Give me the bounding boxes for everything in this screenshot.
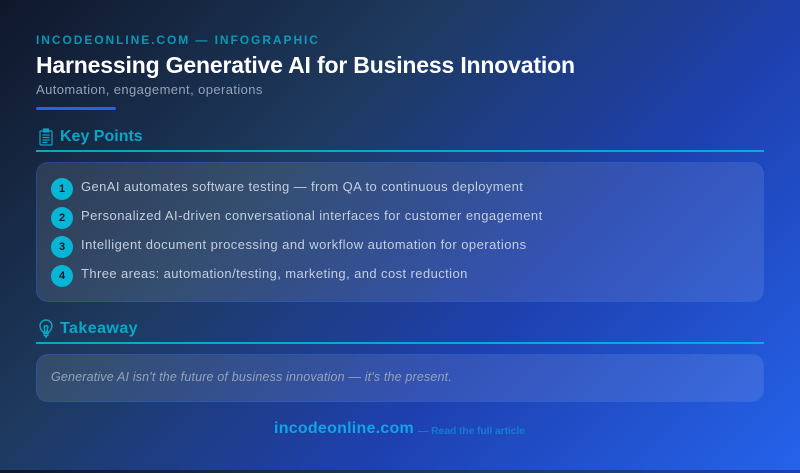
panel: key points: [36, 162, 764, 302]
icon: clipboard: [39, 128, 53, 146]
accent bar: [36, 107, 116, 110]
heading: Key Points: Key Points: [60, 128, 143, 145]
number badge 1: [51, 178, 73, 200]
subtitle: Automation, engagement, operations: [36, 82, 263, 97]
number badge 4: 4: [59, 270, 65, 282]
heading rule: [36, 342, 764, 344]
number badge 1: 1: [59, 183, 65, 195]
number badge 2: [51, 207, 73, 229]
number badge 2: 2: [59, 212, 65, 224]
heading rule: [36, 150, 764, 152]
number badge 4: [51, 265, 73, 287]
footer note: — Read the full article: [418, 425, 525, 437]
number badge 3: 3: [59, 241, 65, 253]
eyebrow label: INCODEONLINE.COM — INFOGRAPHIC: [36, 33, 320, 47]
icon: light bulb: [39, 319, 53, 338]
point 2 text: Personalized AI-driven conversational interfaces for customer engagement: [81, 208, 543, 223]
point 1 text: GenAI automates software testing — from QA to continuous deployment: [81, 179, 523, 194]
heading: Takeaway: Takeaway: [60, 320, 138, 337]
number badge 3: [51, 236, 73, 258]
panel: takeaway: [36, 354, 764, 402]
title: Harnessing Generative AI for Business Innovation: [36, 52, 575, 78]
point 4 text: Three areas: automation/testing, marketing, and cost reduction: [81, 266, 468, 281]
footer link: incodeonline.com: [274, 420, 414, 437]
takeaway text: Generative AI isn't the future of business innovation — it's the present.: [51, 370, 452, 384]
point 3 text: Intelligent document processing and workflow automation for operations: [81, 237, 527, 252]
